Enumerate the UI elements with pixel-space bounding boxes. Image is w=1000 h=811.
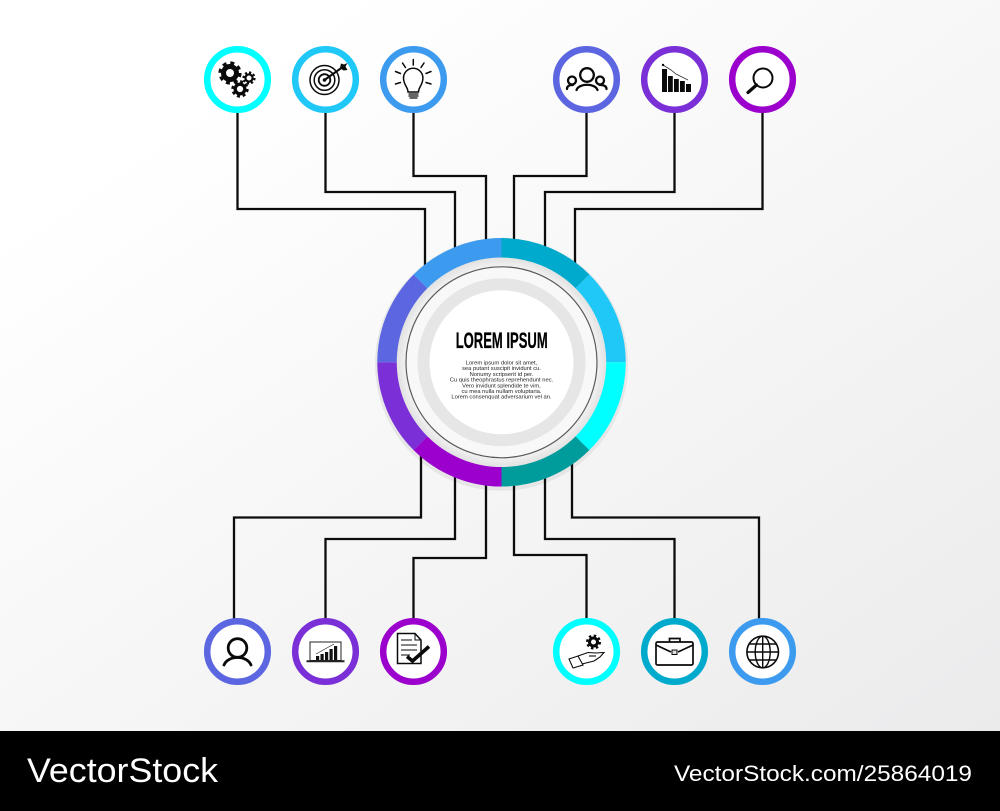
body text: sea putant suscipit invidunt cu. (462, 366, 541, 372)
icon: laptop chart (306, 642, 344, 661)
footer bar (0, 731, 1000, 811)
icon: briefcase (656, 638, 693, 665)
icon: checklist document (398, 634, 429, 664)
icon: target (310, 63, 348, 94)
body text: Lorem consenquat adversarium vel an. (451, 395, 552, 401)
icon: person (224, 639, 251, 665)
body text: Nonumy scripserit id per. (470, 372, 534, 378)
body text: Cu quis theophrastus reprehendunt nec. (450, 378, 554, 384)
icon: team (567, 68, 606, 90)
icon: light bulb (396, 60, 431, 98)
body text: Lorem ipsum dolor sit amet, (466, 360, 538, 366)
heading: LOREM IPSUM (456, 328, 548, 353)
central wheel (387, 248, 616, 477)
icon: globe (747, 636, 778, 668)
icon: gears (220, 63, 254, 96)
body text: cu mea nulla nullam voluptaria. (462, 389, 542, 395)
footer url: VectorStock.com/25864019 (674, 761, 972, 786)
connector lines (234, 112, 762, 620)
node circles (207, 49, 793, 682)
icon: magnifier (748, 68, 772, 92)
body text: Vero invidunt splendide te vim, (462, 383, 541, 389)
icon: hand with gear (569, 636, 604, 668)
icon: declining bar chart (662, 64, 691, 92)
body text (450, 360, 554, 401)
ring segments (387, 248, 616, 477)
footer logo: VectorStock (27, 752, 219, 790)
wheel shadow (375, 238, 628, 491)
